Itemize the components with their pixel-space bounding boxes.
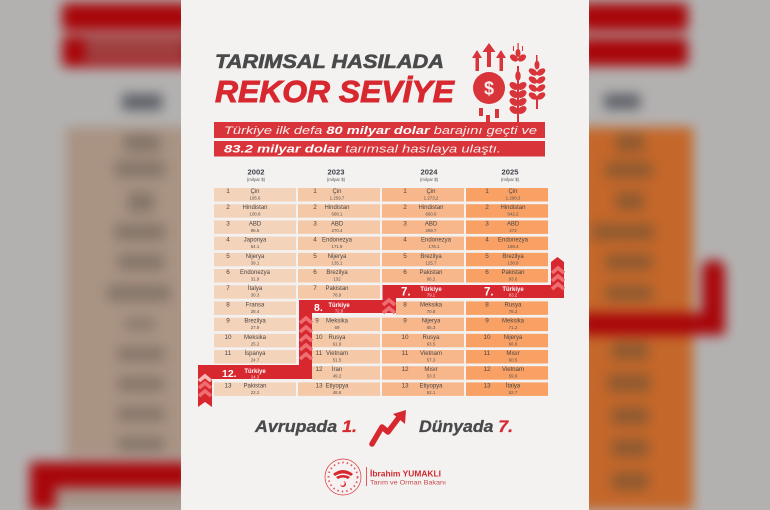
- column 2002: 10: [224, 334, 232, 341]
- column 2002: 25.2: [251, 341, 260, 346]
- column 2024: 13: [401, 382, 409, 389]
- column 2002: 30.3: [251, 293, 260, 298]
- column 2024: Brezilya: [420, 254, 442, 260]
- column 2025: 12: [483, 366, 491, 373]
- column 2024: Etiyopya: [419, 383, 443, 389]
- column 2025: 1: [485, 188, 489, 195]
- column 2023: 1: [313, 188, 317, 195]
- column 2024: Endonezya: [421, 238, 452, 244]
- column 2023: 132: [333, 276, 341, 282]
- column 2024: 70.8: [427, 309, 436, 314]
- column 2025: Mısır: [506, 351, 520, 357]
- column 2024: 57.3: [427, 358, 436, 362]
- title: REKOR SEVİYE: [215, 74, 455, 109]
- column 2002: Fransa: [246, 302, 265, 308]
- column 2002: 3: [226, 220, 230, 227]
- column 2023: Etiyopya: [325, 383, 349, 389]
- rising red path for Türkiye: Türkiye: [328, 303, 350, 309]
- column 2002: 9: [226, 318, 230, 325]
- column 2024: 2024: [421, 168, 438, 176]
- column 2025: 52.7: [509, 390, 518, 395]
- rising red path for Türkiye: Türkiye: [502, 287, 524, 293]
- column 2023: 11: [316, 350, 323, 357]
- column 2024: Meksika: [420, 302, 443, 308]
- column 2002: 54.1: [251, 244, 260, 249]
- column 2025: Nijerya: [504, 335, 523, 341]
- column 2023: 10: [315, 334, 323, 341]
- column 2002: 8: [226, 301, 230, 308]
- column 2023: 171.9: [332, 244, 343, 249]
- column 2023: Çin: [332, 189, 342, 195]
- column 2002: Endonezya: [240, 270, 271, 276]
- column 2024: Hindistan: [418, 205, 444, 211]
- column 2024: 10: [401, 334, 409, 341]
- column 2024: 12: [401, 366, 409, 373]
- rising red path for Türkiye: [198, 257, 564, 407]
- column 2023: 51.5: [333, 358, 342, 362]
- column 2024: 8: [403, 301, 407, 308]
- column 2023: 2: [313, 204, 317, 211]
- column 2023: 5: [313, 253, 317, 260]
- column 2024: 3: [403, 220, 407, 227]
- column 2023: 270.4: [332, 228, 343, 233]
- column 2023: Endonezya: [322, 238, 353, 244]
- column 2025: 11: [484, 350, 491, 357]
- column 2025: 4: [485, 237, 489, 244]
- footer arrowhead: [393, 410, 406, 424]
- column 2024: 269.7: [426, 228, 437, 233]
- column 2025: Rusya: [504, 302, 522, 308]
- column 2025: 71.2: [509, 325, 518, 330]
- column 2024: 9: [403, 318, 407, 325]
- column 2024: Çin: [426, 189, 436, 195]
- column 2025: Pakistan: [501, 270, 525, 276]
- column 2024: 1: [403, 188, 407, 195]
- column 2023: Hindistan: [324, 205, 350, 211]
- column 2025: 138.8: [508, 260, 519, 265]
- minister name and title: Tarım ve Orman Bakanı: [370, 480, 446, 486]
- column 2002: 2002: [248, 168, 264, 176]
- rising red path for Türkiye: 8.: [314, 302, 323, 314]
- column 2002: (milyar $): [247, 177, 266, 182]
- column 2025: 272: [509, 228, 517, 233]
- column 2023: 12: [315, 366, 323, 373]
- column 2025: 1.298,3: [506, 196, 521, 200]
- column 2002: 31.9: [251, 276, 260, 282]
- column 2025: 5: [485, 253, 489, 260]
- title: [215, 52, 455, 109]
- column 2024: 53.3: [427, 374, 436, 379]
- column 2002: 22.2: [251, 390, 260, 395]
- footer text: Dünyada 7.: Dünyada 7.: [419, 418, 513, 436]
- column 2002: Nijerya: [246, 254, 265, 260]
- rising red path for Türkiye: 7.: [401, 286, 411, 298]
- ministry emblem: [325, 459, 361, 495]
- column 2024: 63.5: [427, 341, 436, 346]
- column 2025: 3: [485, 220, 489, 227]
- column 2002: 24.7: [251, 358, 260, 362]
- arrow: rising zigzag: [372, 416, 400, 444]
- column 2002: İtalya: [248, 285, 263, 292]
- column 2024: (milyar $): [420, 177, 439, 182]
- column 2024: Nijerya: [422, 319, 441, 325]
- column 2002: 195.6: [250, 196, 261, 200]
- column 2002: 13: [224, 382, 232, 389]
- column 2024: [382, 168, 464, 396]
- column 2024: Pakistan: [419, 270, 443, 276]
- column 2024: 660.9: [426, 212, 437, 217]
- column 2002: İspanya: [244, 350, 266, 357]
- column 2002: 7: [226, 285, 230, 292]
- column 2025: Hindistan: [500, 205, 526, 211]
- column 2025: 9: [485, 318, 489, 325]
- column 2002: Hindistan: [242, 205, 268, 211]
- column 2023: ABD: [331, 221, 344, 227]
- column 2023: 3: [313, 220, 317, 227]
- column 2024: 1.273,2: [424, 196, 439, 200]
- column 2023: Meksika: [326, 319, 349, 325]
- column 2002: Çin: [250, 189, 260, 195]
- column 2025: 2025: [502, 168, 519, 176]
- column 2025: Çin: [508, 189, 518, 195]
- column 2002: 6: [226, 269, 230, 276]
- column 2023: İran: [332, 366, 342, 373]
- column 2002: Meksika: [244, 335, 267, 341]
- column 2002: 28.4: [251, 309, 260, 314]
- column 2002: ABD: [249, 221, 262, 227]
- rising red path for Türkiye: Türkiye: [244, 369, 266, 375]
- column 2023: [298, 168, 380, 396]
- column 2002: 39.1: [251, 260, 260, 265]
- column 2023: (milyar $): [327, 177, 346, 182]
- column 2025: 66.9: [509, 341, 518, 346]
- column 2002: 1: [226, 188, 230, 195]
- column 2024: 4: [403, 237, 407, 244]
- column 2024: 125.7: [426, 260, 437, 265]
- column 2023: 48.6: [333, 390, 342, 395]
- column 2024: Mısır: [424, 367, 438, 373]
- column 2002: 4: [226, 237, 230, 244]
- column 2023: Pakistan: [325, 286, 349, 292]
- minister name and title: [366, 467, 446, 486]
- column 2024: 5: [403, 253, 407, 260]
- column 2025: 8: [485, 301, 489, 308]
- column 2023: 69: [335, 325, 340, 330]
- column 2002: 100.8: [250, 212, 261, 217]
- column 2002: Pakistan: [243, 383, 267, 389]
- column 2002: Brezilya: [244, 319, 266, 325]
- column 2025: İtalya: [506, 382, 521, 389]
- column 2024: 6: [403, 269, 407, 276]
- column 2023: Nijerya: [328, 254, 347, 260]
- column 2025: 13: [483, 382, 491, 389]
- column 2002: [214, 168, 296, 396]
- column 2002: 96.6: [251, 228, 260, 233]
- column 2023: 7: [313, 285, 317, 292]
- column 2023: 6: [313, 269, 317, 276]
- column 2025: 10: [483, 334, 491, 341]
- rising red path for Türkiye: Türkiye: [420, 287, 442, 293]
- column 2025: 78.3: [509, 309, 518, 314]
- column 2023: Vietnam: [326, 351, 348, 357]
- column 2002: 5: [226, 253, 230, 260]
- column 2023: 2023: [328, 168, 344, 176]
- column 2025: 60.5: [509, 358, 518, 362]
- footer text: Avrupada 1.: Avrupada 1.: [254, 418, 357, 436]
- rising red path for Türkiye: 83.2: [509, 292, 518, 298]
- column 2024: 52.1: [427, 390, 436, 395]
- column 2024: Vietnam: [420, 351, 442, 357]
- column 2025: 642.2: [508, 212, 519, 217]
- column 2023: 4: [313, 237, 317, 244]
- icon: rising arrows, dollar coin and wheat: [472, 43, 547, 123]
- column 2023: Rusya: [328, 335, 346, 341]
- column 2025: ABD: [507, 221, 520, 227]
- rising red path for Türkiye: 24.3: [251, 374, 260, 380]
- icon: rising arrows, dollar coin and wheat: $: [484, 78, 494, 98]
- column 2023: 668.1: [332, 212, 343, 217]
- rising red path for Türkiye: 7.: [484, 286, 494, 298]
- column 2025: Vietnam: [502, 367, 524, 373]
- column 2024: 176.1: [428, 244, 440, 249]
- column 2025: Meksika: [502, 319, 525, 325]
- column 2025: 2: [485, 204, 489, 211]
- column 2023: 1.259,7: [330, 196, 345, 200]
- column 2002: 27.9: [251, 325, 260, 330]
- title: TARIMSAL HASILADA: [215, 52, 444, 73]
- column 2025: 6: [485, 269, 489, 276]
- column 2023: 61.9: [333, 341, 342, 346]
- column 2025: [466, 168, 548, 396]
- column 2023: Brezilya: [326, 270, 348, 276]
- column 2023: 78.9: [333, 293, 342, 298]
- minister name and title: İbrahim YUMAKLI: [370, 470, 441, 478]
- column 2002: 2: [226, 204, 230, 211]
- column 2025: Endonezya: [498, 238, 529, 244]
- subtitle banners: [214, 122, 545, 156]
- column 2002: 11: [225, 350, 232, 357]
- column 2025: 93.6: [509, 276, 518, 282]
- column 2024: 2: [403, 204, 407, 211]
- column 2023: 49.2: [333, 374, 342, 379]
- column 2025: 189.4: [508, 244, 519, 249]
- column 2024: ABD: [425, 221, 438, 227]
- column 2025: Brezilya: [502, 254, 524, 260]
- column 2024: 66.2: [427, 276, 436, 282]
- central poster panel: [181, 0, 589, 510]
- rising red path for Türkiye: 79.1: [427, 292, 436, 298]
- column 2002: Japonya: [244, 238, 267, 244]
- rising red path for Türkiye: 72.9: [335, 308, 344, 314]
- column 2023: 13: [315, 382, 323, 389]
- column 2024: 11: [402, 350, 409, 357]
- column 2025: (milyar $): [501, 177, 520, 182]
- column 2024: 65.3: [427, 325, 436, 330]
- rising red path for Türkiye: 12.: [222, 368, 237, 380]
- column 2023: 135.1: [332, 260, 343, 265]
- column 2023: 9: [315, 318, 319, 325]
- column 2025: 59.9: [509, 374, 518, 379]
- subtitle banners: 83.2 milyar dolar tarımsal hasılaya ulaştı.: [224, 144, 501, 156]
- column 2024: Rusya: [422, 335, 440, 341]
- subtitle banners: Türkiye ilk defa 80 milyar dolar barajını geçti ve: [224, 125, 537, 137]
